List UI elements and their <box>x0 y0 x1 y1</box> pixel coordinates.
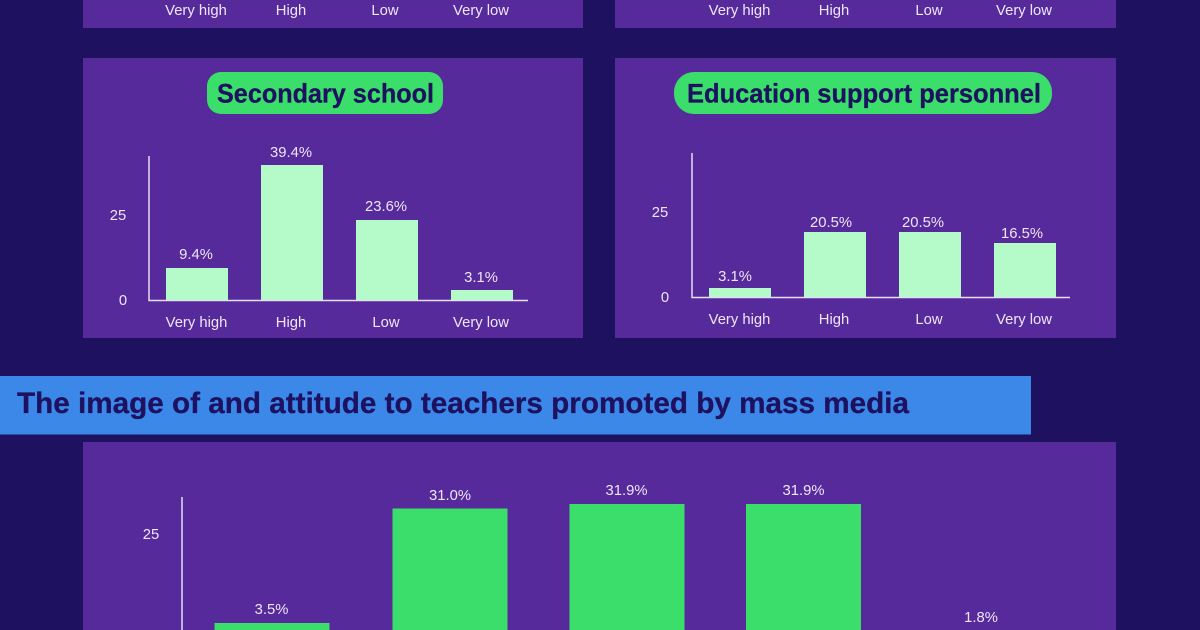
heading: secondary school: Secondary school <box>217 78 434 108</box>
bar chart: education support personnel <box>652 153 1070 328</box>
bar chart: secondary school: 23.6% <box>365 199 407 215</box>
bar chart: education support personnel: Low <box>915 312 943 328</box>
panel: cropped chart, top right: Very high <box>709 3 770 19</box>
bar chart: education support personnel: 0 <box>661 290 669 306</box>
panel: education support personnel <box>615 58 1116 338</box>
heading: secondary school <box>207 72 443 114</box>
bar chart: mass media: 25 <box>143 527 159 543</box>
panel: cropped chart, top left: High <box>276 3 306 19</box>
section banner: mass media <box>0 376 1031 434</box>
panel: cropped chart, top right: Low <box>915 3 943 19</box>
bar chart: mass media: 3.5% <box>255 602 288 618</box>
bar chart: education support personnel: Very low <box>996 312 1052 328</box>
bar chart: secondary school: High <box>276 315 306 331</box>
bar chart: mass media: 31.0% <box>429 488 471 504</box>
bar chart: secondary school: 25 <box>110 208 126 224</box>
bar chart: education support personnel: Very high <box>709 312 770 328</box>
bar chart: secondary school: Very low <box>453 315 509 331</box>
bar chart: secondary school: 9.4% <box>179 247 213 263</box>
panel: secondary school <box>83 58 583 338</box>
panel: mass media chart <box>83 442 1116 630</box>
bar chart: education support personnel: 25 <box>652 205 668 221</box>
bar chart: education support personnel: 20.5% <box>902 215 944 231</box>
bar chart: secondary school <box>110 145 528 331</box>
bar chart: secondary school: 39.4% <box>270 145 312 161</box>
panel: cropped chart, top right: Very low <box>996 3 1052 19</box>
bar chart: education support personnel: 16.5% <box>1001 226 1043 242</box>
bar chart: mass media: 31.9% <box>606 483 647 499</box>
bar chart: secondary school: 3.1% <box>464 270 498 286</box>
section banner: mass media: The image of and attitude to teachers promoted by mass media <box>17 387 909 420</box>
panel: cropped chart, top right <box>615 0 1116 28</box>
bar chart: mass media: 31.9% <box>783 483 824 499</box>
bar chart: secondary school: Low <box>372 315 400 331</box>
bar chart: education support personnel: 20.5% <box>810 215 852 231</box>
panel: cropped chart, top left <box>83 0 583 28</box>
heading: education support personnel: Education support personnel <box>687 78 1041 108</box>
bar chart: mass media <box>143 483 998 630</box>
panel: cropped chart, top left: Very high <box>165 3 227 19</box>
panel: cropped chart, top right: High <box>819 3 849 19</box>
bar chart: secondary school: Very high <box>166 315 227 331</box>
bar chart: mass media: 1.8% <box>964 610 998 626</box>
heading: education support personnel <box>674 72 1052 114</box>
bar chart: secondary school: 0 <box>119 293 127 309</box>
bar chart: education support personnel: 3.1% <box>718 269 752 285</box>
bar chart: education support personnel: High <box>819 312 849 328</box>
panel: cropped chart, top left: Very low <box>453 3 509 19</box>
panel: cropped chart, top left: Low <box>371 3 399 19</box>
